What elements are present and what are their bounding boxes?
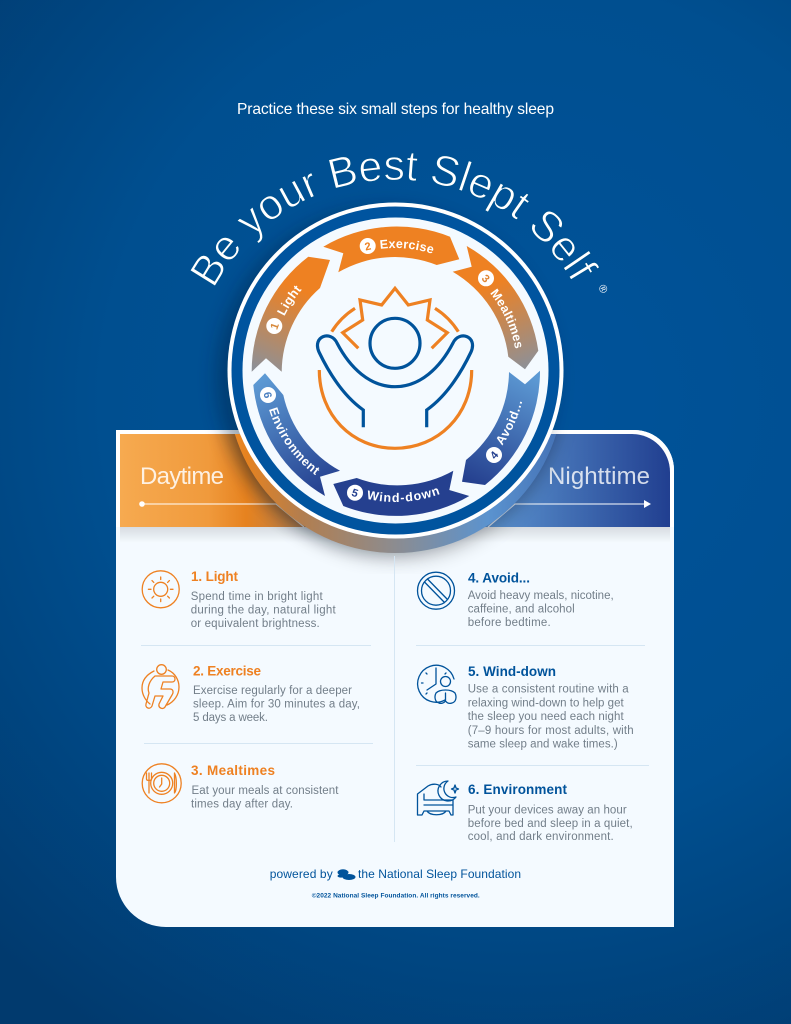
central badge bbox=[228, 202, 564, 553]
step 5: Wind-down: Use a consistent routine with a bbox=[468, 684, 629, 696]
arrow: 5 Wind-down bbox=[333, 470, 470, 516]
arrow: 3 Mealtimes bbox=[452, 246, 538, 370]
step 1: Light: or equivalent brightness. bbox=[191, 618, 320, 630]
step 2: Exercise: 2. Exercise bbox=[193, 664, 261, 679]
step 4: Avoid: Avoid heavy meals, nicotine, bbox=[468, 590, 614, 602]
arrow: 3 Mealtimes: Mealtimes bbox=[490, 288, 522, 348]
arrow: 2 Exercise: Exercise bbox=[380, 240, 434, 254]
footer: powered by the National Sleep Foundation: powered by bbox=[270, 867, 333, 881]
footer: powered by the National Sleep Foundation bbox=[270, 867, 521, 900]
arrow: 5 Wind-down: 5 bbox=[350, 487, 359, 500]
step 1: Light: 1. Light bbox=[191, 569, 238, 584]
icon: plate and cutlery bbox=[142, 764, 181, 803]
step 4: Avoid bbox=[418, 570, 614, 629]
header band: Nighttime bbox=[395, 434, 670, 527]
arrow: 4 Avoid: 4 bbox=[488, 449, 502, 462]
header band: Daytime: Daytime bbox=[140, 463, 224, 490]
panel: daytime and nighttime steps bbox=[116, 430, 674, 927]
footer: powered by the National Sleep Foundation: ©2022 National Sleep Foundation. All rights reserved. bbox=[312, 892, 480, 900]
step 6: Environment: cool, and dark environment. bbox=[468, 831, 614, 843]
arrow: 6 Environment bbox=[253, 373, 340, 496]
step 2: Exercise: Exercise regularly for a deeper bbox=[193, 685, 352, 697]
arrow: 3 Mealtimes: 3 bbox=[479, 273, 492, 285]
step 2: Exercise: sleep. Aim for 30 minutes a day, bbox=[193, 698, 360, 710]
icon: sun bbox=[142, 571, 179, 608]
step 5: Wind-down: the sleep you need each night bbox=[468, 711, 624, 723]
arrow: 1 Light: 1 bbox=[269, 321, 282, 331]
footer: powered by the National Sleep Foundation: the National Sleep Foundation bbox=[358, 867, 521, 881]
step 1: Light bbox=[142, 569, 336, 630]
step 3: Mealtimes: times day after day. bbox=[191, 798, 293, 810]
crescent shadow bbox=[225, 434, 565, 568]
header band: Daytime bbox=[120, 434, 395, 527]
step 4: Avoid: 4. Avoid... bbox=[468, 570, 530, 585]
step 5: Wind-down bbox=[418, 664, 634, 751]
header band: Nighttime: Nighttime bbox=[548, 463, 650, 490]
step 6: Environment: 6. Environment bbox=[468, 782, 568, 797]
icon: clock and reader bbox=[418, 665, 456, 703]
title: Be your Best Slept Self: Be your Best Slept Self bbox=[190, 153, 599, 286]
arrow: 4 Avoid: Avoid... bbox=[496, 402, 522, 446]
step 4: Avoid: before bedtime. bbox=[468, 617, 551, 629]
icon: person with sunburst bbox=[317, 288, 473, 448]
step 1: Light: during the day, natural light bbox=[191, 604, 336, 616]
arrow: 2 Exercise: 2 bbox=[364, 240, 372, 253]
step 2: Exercise: 5 days a week. bbox=[193, 712, 268, 724]
arrow: 6 Environment: 6 bbox=[261, 391, 273, 399]
arrow: 6 Environment: Environment bbox=[269, 407, 320, 476]
title: Be your Best Slept Self: ® bbox=[595, 283, 610, 296]
step 4: Avoid: caffeine, and alcohol bbox=[468, 604, 575, 616]
step 6: Environment: before bed and sleep in a quiet, bbox=[468, 818, 633, 830]
icon: person exercising bbox=[142, 665, 179, 708]
step 3: Mealtimes: Eat your meals at consistent bbox=[192, 785, 339, 797]
divider lines bbox=[141, 556, 649, 842]
step 5: Wind-down: same sleep and wake times.) bbox=[468, 739, 618, 751]
step 6: Environment bbox=[418, 781, 633, 843]
step 5: Wind-down: (7–9 hours for most adults, with bbox=[468, 725, 634, 737]
step 3: Mealtimes bbox=[142, 763, 339, 810]
arrow: 5 Wind-down: Wind-down bbox=[368, 488, 440, 502]
step 6: Environment: Put your devices away an hour bbox=[468, 804, 627, 816]
step 5: Wind-down: relaxing wind-down to help get bbox=[468, 698, 624, 710]
tagline: Practice these six small steps for healthy sleep bbox=[237, 101, 554, 118]
icon: prohibited sign bbox=[418, 572, 454, 609]
icon: bed and moon bbox=[418, 781, 458, 815]
step 5: Wind-down: 5. Wind-down bbox=[468, 664, 556, 679]
circle shadow bbox=[216, 208, 556, 548]
step 1: Light: Spend time in bright light bbox=[191, 591, 323, 603]
arrow: 1 Light: Light bbox=[277, 286, 302, 316]
arrow: 4 Avoid bbox=[462, 370, 540, 485]
step 3: Mealtimes: 3. Mealtimes bbox=[191, 763, 275, 778]
arrow: 2 Exercise bbox=[323, 226, 460, 272]
step 2: Exercise bbox=[142, 664, 360, 724]
icon: foundation logo bbox=[338, 869, 356, 880]
arrow: 1 Light bbox=[252, 256, 330, 372]
